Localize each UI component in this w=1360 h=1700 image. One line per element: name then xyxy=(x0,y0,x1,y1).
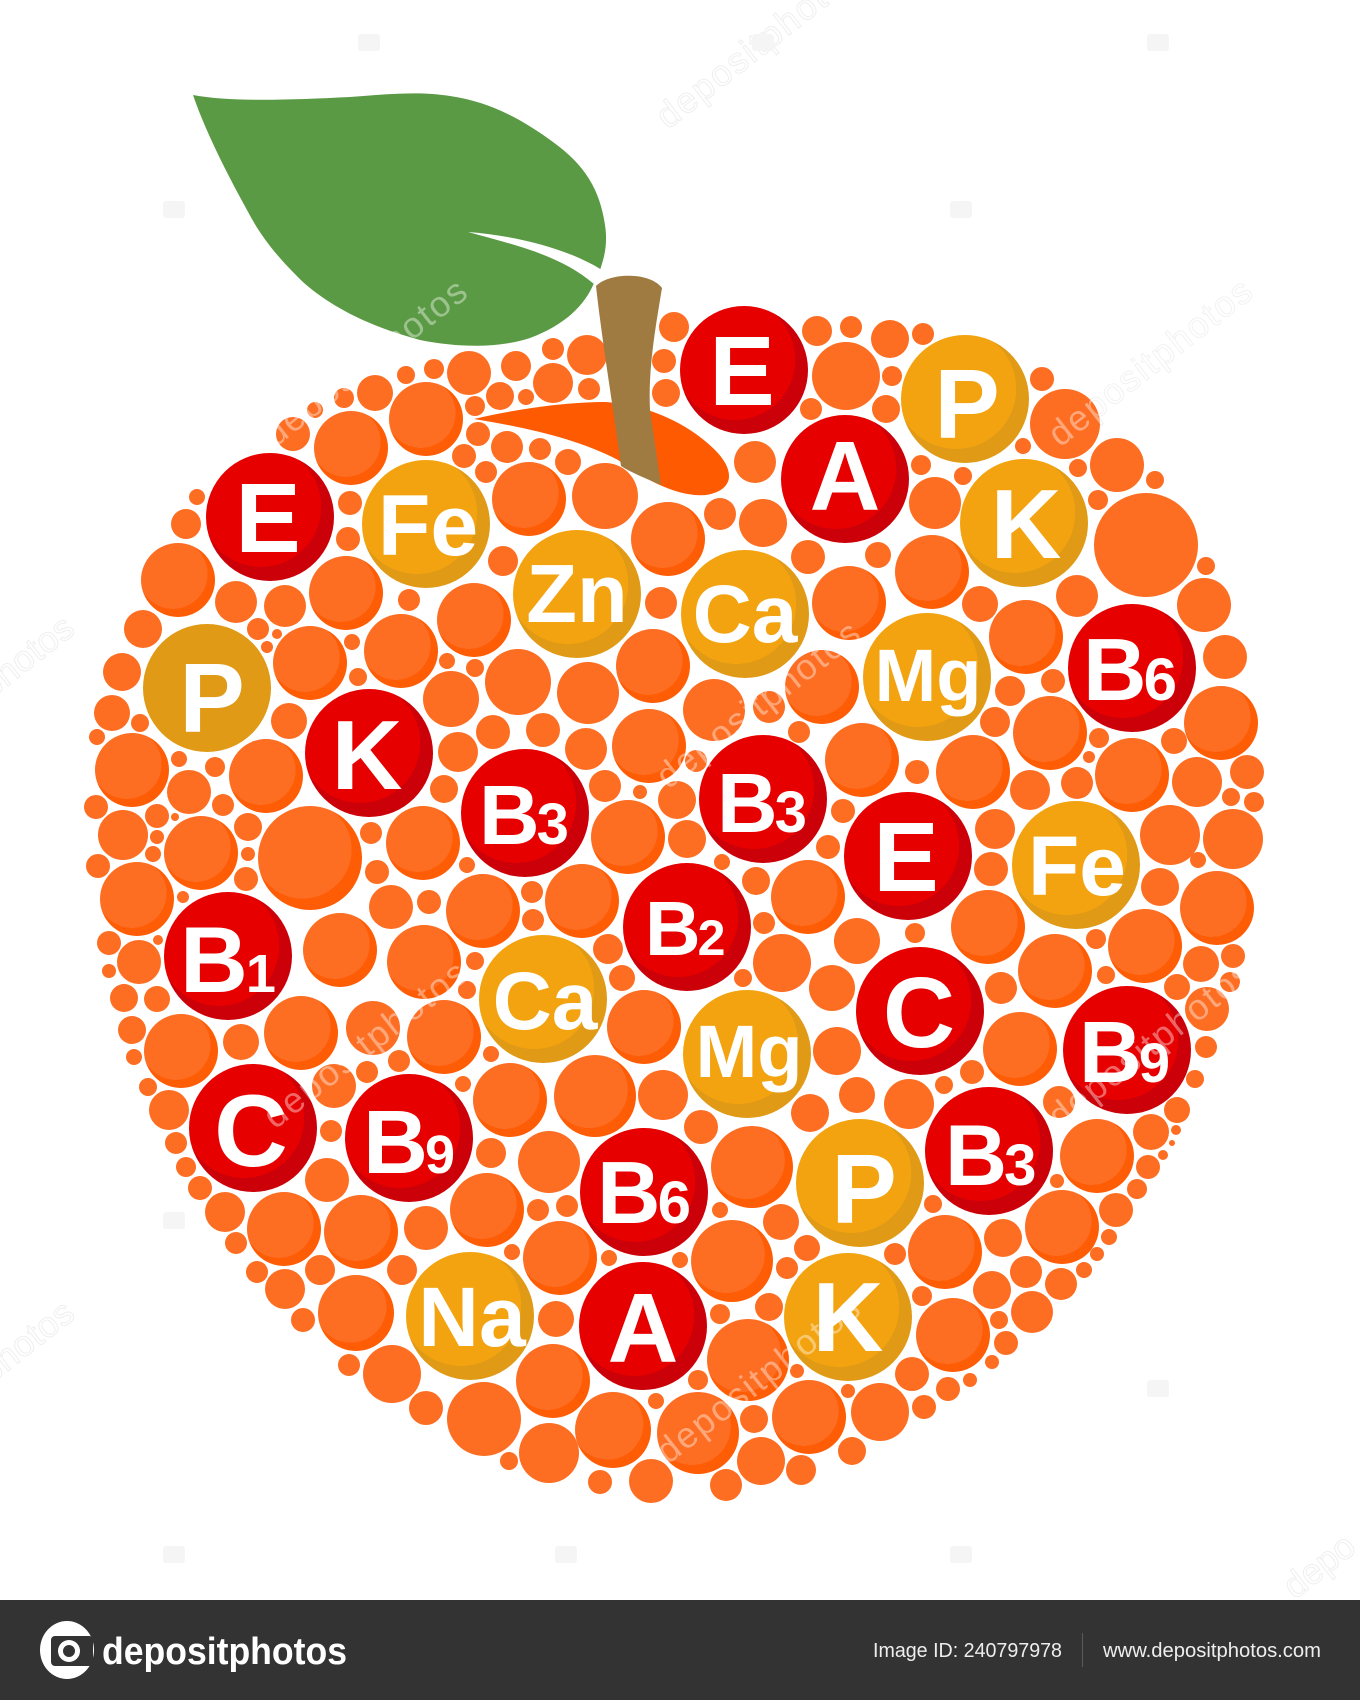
badge: Ca xyxy=(479,935,607,1063)
badge: Mg xyxy=(863,613,991,741)
badge: Fe xyxy=(1012,801,1140,929)
badge: K: K xyxy=(813,1262,883,1372)
watermarks: depositphotos xyxy=(255,270,475,454)
badge: vitamin B1: B1 xyxy=(180,907,276,1012)
badge: vitamin E: E xyxy=(709,316,775,426)
watermarks: depositphotos xyxy=(1040,952,1260,1136)
badge: Na: Na xyxy=(418,1270,527,1364)
badge: vitamin B2: B2 xyxy=(645,886,725,972)
badge: vitamin B9: B9 xyxy=(1079,1004,1170,1101)
badge: P: P xyxy=(831,1134,897,1244)
badge: vitamin B3: B3 xyxy=(479,768,569,862)
peach body: large orange circles with shading xyxy=(95,382,1258,1474)
badge: Fe xyxy=(362,460,490,588)
watermarks: depositphotos xyxy=(648,612,868,796)
badge: Na xyxy=(406,1252,534,1380)
badge: vitamin B3 xyxy=(461,749,589,877)
badge: K xyxy=(305,689,433,817)
watermarks xyxy=(255,270,1260,1471)
footer bar xyxy=(0,1600,1360,1700)
stem xyxy=(596,276,662,485)
badge: Ca: Ca xyxy=(693,569,799,660)
badge: Ca: Ca xyxy=(493,956,599,1047)
badge: vitamin B3: B3 xyxy=(945,1108,1036,1204)
badge: Mg: Mg xyxy=(696,1010,802,1093)
badge: vitamin C: C xyxy=(214,1074,288,1188)
badge: Zn xyxy=(513,530,641,658)
badge: vitamin B2 xyxy=(623,863,751,991)
badge: vitamin B6: B6 xyxy=(1083,620,1177,719)
badge: Zn: Zn xyxy=(526,547,628,640)
peach body: small orange circles xyxy=(84,312,1264,1503)
badge: vitamin B6 xyxy=(580,1128,708,1256)
icon: depositphotos logo xyxy=(40,1621,94,1679)
badge: P: P xyxy=(934,349,1000,459)
badge: vitamin A xyxy=(781,415,909,543)
badge: Fe: Fe xyxy=(1028,819,1126,913)
badge: K xyxy=(784,1253,912,1381)
image id: Image ID: 240797978 xyxy=(873,1640,1062,1662)
badge: P: P xyxy=(179,643,245,753)
badge: K xyxy=(960,459,1088,587)
leaf xyxy=(193,93,606,346)
badge: Ca xyxy=(681,550,809,678)
badge: vitamin E: E xyxy=(873,802,939,912)
badge: vitamin C xyxy=(856,947,984,1075)
badge: vitamin B9 xyxy=(345,1074,473,1202)
badge: vitamin E xyxy=(206,453,334,581)
badge: vitamin B3: B3 xyxy=(717,756,807,850)
badge: vitamin A: A xyxy=(810,421,880,531)
badge: vitamin B6: B6 xyxy=(597,1143,691,1242)
badge: vitamin B1 xyxy=(164,892,292,1020)
badge: Mg: Mg xyxy=(875,634,981,717)
badge: vitamin B6 xyxy=(1068,604,1196,732)
badge: vitamin B9: B9 xyxy=(363,1093,455,1193)
logo wordmark: depositphotos xyxy=(102,1631,347,1673)
badge: Fe: Fe xyxy=(378,478,478,574)
peach crease xyxy=(474,402,729,495)
badge: vitamin B3 xyxy=(925,1087,1053,1215)
badge: vitamin B3 xyxy=(699,735,827,863)
badge: K: K xyxy=(332,700,402,810)
badge: vitamin E: E xyxy=(235,463,301,573)
badge: P xyxy=(901,335,1029,463)
badge: vitamin E xyxy=(844,792,972,920)
badge: P xyxy=(143,624,271,753)
watermarks: depositphotos xyxy=(255,952,475,1136)
badge: P xyxy=(796,1119,924,1247)
badge: vitamin B9 xyxy=(1063,986,1191,1114)
faint watermark on background: depositphotos xyxy=(1040,270,1260,454)
watermarks: depositphotos xyxy=(648,1287,868,1471)
badge: vitamin A xyxy=(579,1262,707,1390)
watermarks: depositphotos xyxy=(1040,270,1260,454)
badge: vitamin E xyxy=(680,306,808,434)
badge: vitamin C: C xyxy=(883,957,955,1069)
website url: www.depositphotos.com xyxy=(1102,1640,1321,1662)
badge: K: K xyxy=(991,469,1061,579)
badge: Mg xyxy=(683,990,811,1118)
badge: vitamin C xyxy=(189,1064,317,1192)
badge: vitamin A: A xyxy=(608,1273,678,1383)
